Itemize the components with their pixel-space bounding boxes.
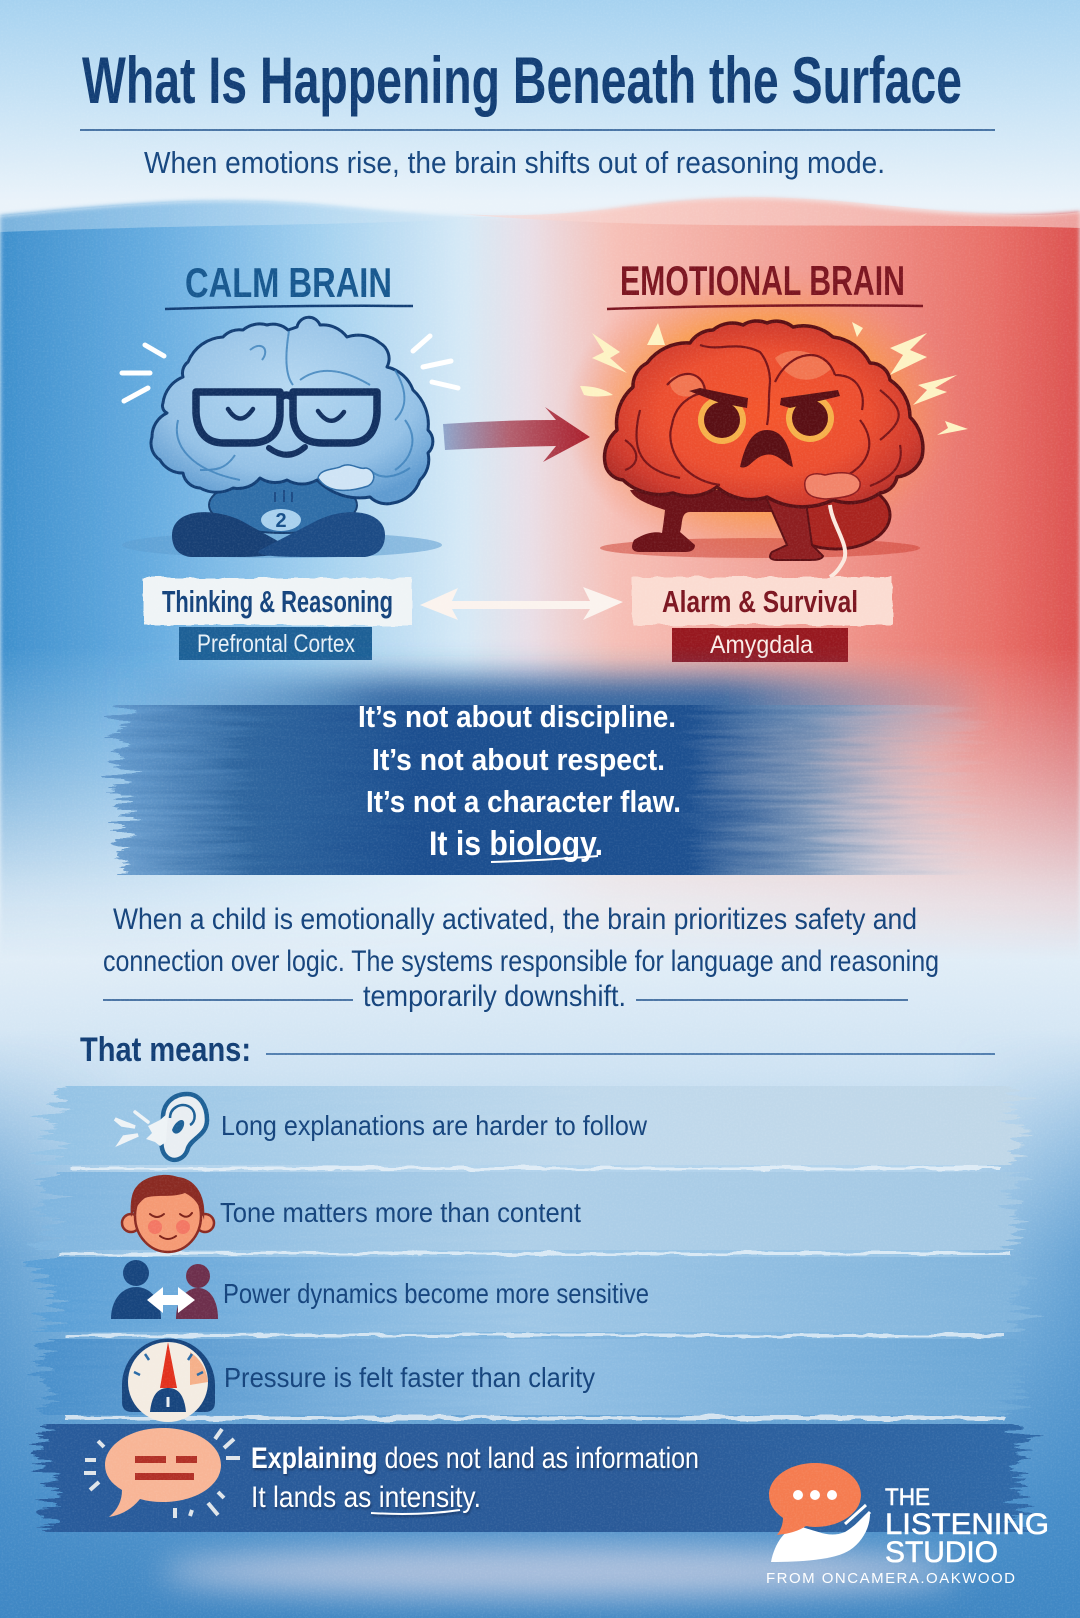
logo wordmark: LISTENING [885, 1508, 1049, 1541]
message text: It’s not about discipline. [358, 699, 676, 734]
text: explaining: It lands as intensity. [251, 1481, 481, 1514]
paragraph: explanation: temporarily downshift. [363, 980, 626, 1013]
panel: calm brain [122, 259, 458, 660]
icon: alarm bolts [580, 322, 968, 435]
icon: speech bubble in hand [769, 1463, 870, 1562]
panel: not discipline message [120, 678, 980, 875]
icon: two people with arrow [111, 1260, 218, 1319]
label: prefrontal cortex: Prefrontal Cortex [197, 630, 355, 658]
text: long explanations: Long explanations are harder to follow [221, 1110, 648, 1141]
arrow: calm to emotional [443, 407, 590, 462]
connector line to amygdala label [830, 505, 845, 577]
logo: the listening studio [766, 1463, 1049, 1587]
text: pressure: Pressure is felt faster than clarity [224, 1362, 595, 1393]
row: long explanations [50, 1086, 1015, 1170]
row: power dynamics [45, 1257, 1015, 1337]
text: tone matters: Tone matters more than content [220, 1197, 581, 1228]
label: thinking and reasoning [143, 578, 412, 625]
message text: It’s not about respect. [372, 742, 665, 777]
heading: emotional brain [607, 257, 923, 309]
text: explaining [251, 1442, 699, 1514]
message text: It is biology. [429, 825, 603, 863]
label: thinking and reasoning: Thinking & Reasoning [162, 584, 393, 619]
dark watercolor band [120, 678, 980, 875]
icon: calm brain character [122, 317, 442, 558]
message text [358, 699, 681, 863]
paragraph: explanation: When a child is emotionally activated, the brain prioritizes safety and [113, 903, 917, 936]
logo wordmark: THE [885, 1484, 930, 1511]
glow behind emotional brain [563, 265, 963, 565]
icon: pressure gauge [122, 1338, 215, 1422]
label: alarm and survival: Alarm & Survival [662, 584, 858, 619]
list: that means rows [45, 1086, 1020, 1532]
label: amygdala: Amygdala [710, 631, 813, 659]
paragraph: explanation: connection over logic. The systems responsible for language and reasoning [103, 945, 939, 978]
heading: that means: That means: [80, 1031, 251, 1069]
paragraph: explanation [103, 903, 939, 1013]
subtitle: When emotions rise, the brain shifts out of reasoning mode. [144, 145, 885, 180]
logo wordmark: STUDIO [885, 1536, 998, 1569]
heading: calm brain: CALM BRAIN [185, 259, 392, 306]
icon: ear [115, 1094, 207, 1160]
label: alarm and survival [632, 577, 892, 625]
text: power dynamics: Power dynamics become more sensitive [223, 1278, 649, 1309]
logo wordmark: FROM ONCAMERA.OAKWOOD [766, 1570, 1015, 1587]
icon: calm child face [122, 1175, 214, 1252]
text: explaining: Explaining does not land as information [251, 1442, 699, 1475]
label: amygdala [672, 628, 848, 662]
icon: intensity speech bubble [84, 1428, 240, 1518]
icon: calm brain character: 2 [275, 510, 287, 532]
logo wordmark [766, 1484, 1049, 1587]
row: explaining [45, 1424, 1020, 1532]
heading: emotional brain: EMOTIONAL BRAIN [620, 257, 905, 304]
arrow: two-way connection [420, 587, 623, 620]
icon: calm ticks [122, 336, 458, 401]
icon: emotional brain character [600, 321, 923, 560]
row: pressure [45, 1338, 1015, 1422]
row: tone matters [45, 1172, 1015, 1255]
panel: emotional brain [563, 257, 968, 662]
message text: It’s not a character flaw. [366, 784, 681, 819]
